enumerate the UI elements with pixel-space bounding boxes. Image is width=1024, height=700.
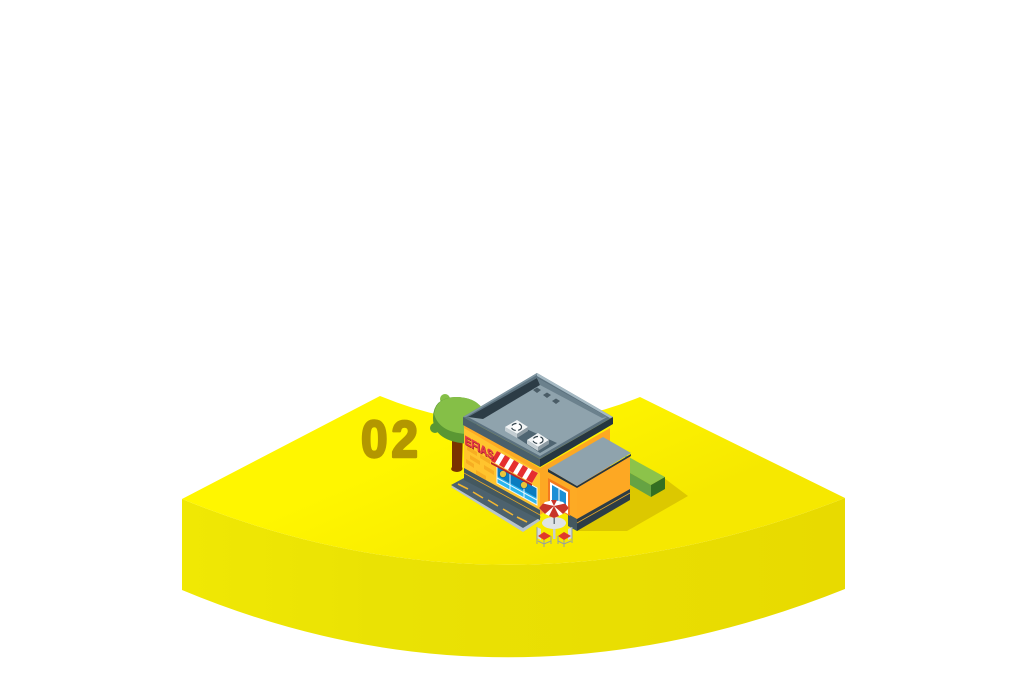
annex left wall xyxy=(548,470,577,520)
icon: hedge xyxy=(625,455,665,497)
umbrella xyxy=(539,500,569,524)
air conditioning shadow xyxy=(510,426,557,453)
sidewalk road xyxy=(451,478,541,532)
roof xyxy=(463,373,613,467)
table xyxy=(542,517,566,539)
building shadow xyxy=(577,470,688,531)
air conditioning unit 1 xyxy=(505,420,528,438)
left wall xyxy=(464,423,540,515)
left base band xyxy=(464,468,540,520)
annex right wall xyxy=(577,455,630,520)
building: shop xyxy=(451,373,631,532)
tree crown xyxy=(430,394,482,444)
left chair xyxy=(537,527,551,547)
shop sign: EFIAS xyxy=(465,433,494,464)
window plants xyxy=(500,470,506,478)
icon: cafe table with umbrella and chairs xyxy=(537,500,572,547)
roof floor xyxy=(468,378,607,456)
annex door xyxy=(548,478,570,516)
roof vents xyxy=(533,388,560,404)
platform side face xyxy=(182,498,845,657)
shop sign: EFIAS xyxy=(464,432,494,463)
right wall xyxy=(540,428,610,515)
roof inner parapet shadow xyxy=(468,378,540,419)
right chair xyxy=(558,527,572,547)
roof rim faces xyxy=(463,417,540,467)
annex base xyxy=(568,489,630,531)
annex xyxy=(548,437,631,531)
tree trunk xyxy=(451,430,463,472)
annex roof xyxy=(548,469,577,488)
step number: 02 xyxy=(361,410,418,468)
air conditioning unit 2 xyxy=(527,433,549,451)
roof rim top xyxy=(463,373,613,459)
shop window xyxy=(497,466,537,505)
platform top face xyxy=(182,396,845,565)
platform: yellow isometric ring segment xyxy=(182,396,845,657)
awning xyxy=(491,451,538,486)
icon: tree xyxy=(430,394,482,472)
